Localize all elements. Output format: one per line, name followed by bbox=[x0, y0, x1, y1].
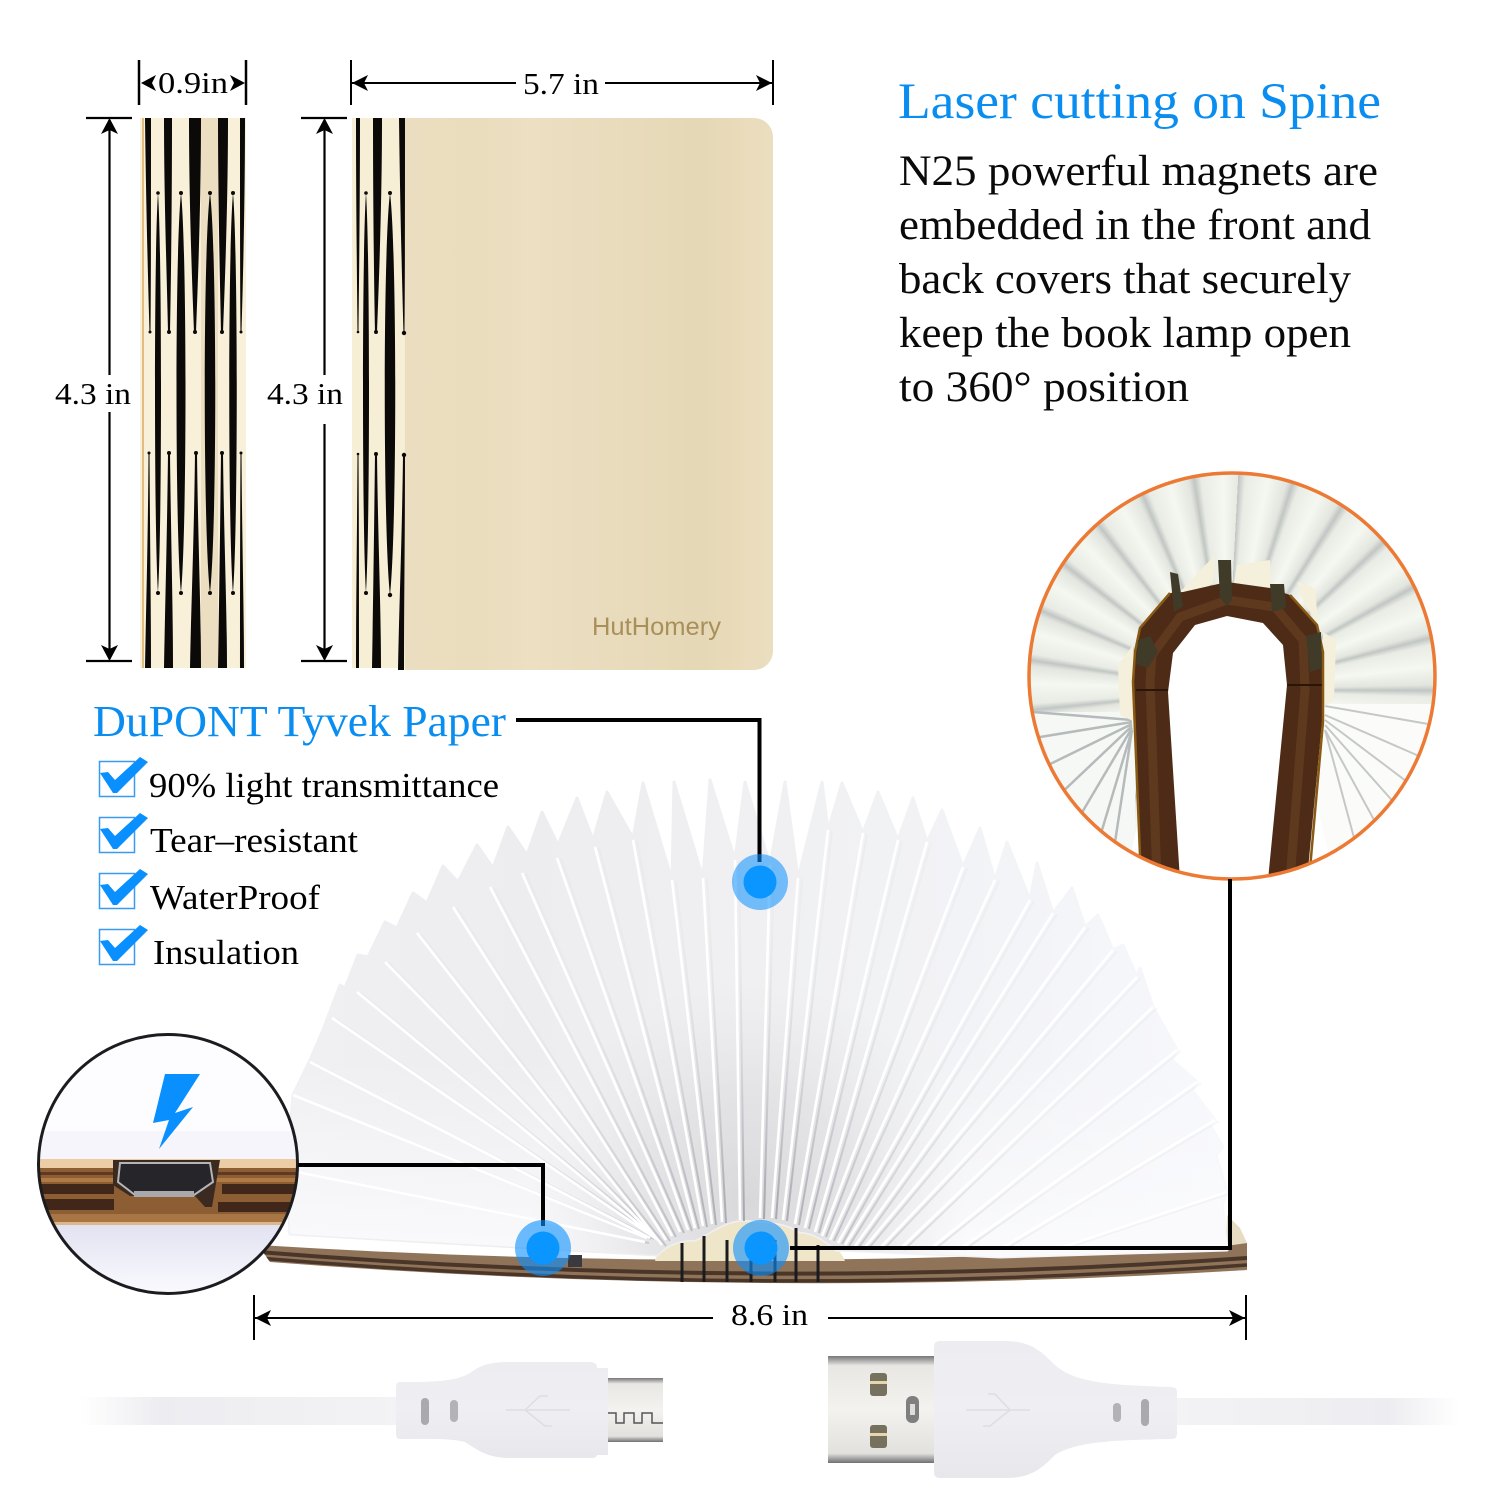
page fan silhouette bbox=[287, 780, 1227, 1257]
text block: magnets description bbox=[899, 148, 1378, 411]
text block: magnets description: back covers that securely bbox=[899, 256, 1352, 303]
inset circle: laser-cut spine close-up bbox=[1020, 473, 1440, 900]
dimension: spine width 0.9in: 0.9in bbox=[158, 65, 229, 100]
dimension: open width 8.6 in bbox=[254, 1295, 1246, 1340]
text block: magnets description: keep the book lamp open bbox=[899, 310, 1351, 357]
core shading bbox=[287, 780, 1227, 1257]
port recess bbox=[113, 1160, 220, 1207]
page folds bbox=[1030, 474, 1434, 834]
cream glue patches bbox=[1118, 555, 1336, 722]
heading: Laser cutting on Spine: Laser cutting on Spine bbox=[898, 74, 1381, 130]
USB cable: USB-A end bbox=[828, 1341, 1460, 1478]
spine threads bbox=[682, 1228, 818, 1282]
leader line: paper callout bbox=[516, 720, 760, 862]
item: WaterProof bbox=[100, 869, 320, 917]
text block: magnets description: embedded in the front and bbox=[899, 202, 1371, 249]
wood layers bbox=[40, 1168, 296, 1214]
leader line: USB port callout bbox=[298, 1165, 543, 1226]
USB port notch bbox=[568, 1255, 582, 1267]
connector body bbox=[934, 1341, 1177, 1478]
item: Tear-resistant: Tear–resistant bbox=[150, 821, 358, 860]
dimension: height 4.3 in, cover view bbox=[267, 118, 347, 661]
item: WaterProof: WaterProof bbox=[150, 878, 320, 917]
marker: paper bbox=[732, 854, 788, 910]
inset circle: micro-USB charging port bbox=[38, 1034, 300, 1297]
item: 90% light transmittance bbox=[100, 757, 499, 805]
dimension: height 4.3 in, cover view: 4.3 in bbox=[267, 376, 344, 411]
brand name on cover: HutHomery bbox=[592, 613, 722, 641]
text block: magnets description: N25 powerful magnets are bbox=[899, 148, 1378, 195]
checklist: paper features bbox=[100, 757, 499, 972]
marker: spine bbox=[733, 1220, 789, 1276]
fold shadows bbox=[291, 831, 1231, 1250]
spine view: narrow book bbox=[140, 118, 246, 668]
lower pages lighter bbox=[287, 780, 1227, 1257]
lower pages, left bbox=[1034, 712, 1135, 850]
wooden covers bbox=[264, 1243, 1247, 1284]
port metal bbox=[118, 1163, 213, 1195]
dimension: book width 5.7 in bbox=[351, 60, 773, 105]
dimension: spine width 0.9in bbox=[139, 60, 246, 105]
dimension: height 4.3 in, spine view bbox=[55, 118, 132, 661]
icon: lightning bolt bbox=[153, 1074, 200, 1149]
marker: USB port bbox=[515, 1220, 571, 1276]
brown spine arch bbox=[1133, 582, 1323, 880]
cream spine bbox=[655, 1215, 845, 1261]
item: Tear-resistant bbox=[100, 813, 358, 860]
dimension: height 4.3 in, spine view: 4.3 in bbox=[55, 376, 132, 411]
dimension: book width 5.7 in: 5.7 in bbox=[523, 66, 600, 101]
item: Insulation: Insulation bbox=[153, 933, 299, 972]
cover corner bbox=[1226, 1215, 1247, 1246]
leader line: spine callout bbox=[790, 879, 1230, 1248]
USB-A plug metal bbox=[828, 1356, 936, 1463]
item: Insulation bbox=[100, 925, 299, 972]
interior opening bbox=[1132, 616, 1287, 878]
fold highlights bbox=[287, 830, 1227, 1249]
heading: DuPONT Tyvek Paper: DuPONT Tyvek Paper bbox=[93, 697, 506, 746]
USB cable: micro-USB end bbox=[80, 1362, 663, 1458]
lower pages, right bbox=[1316, 704, 1432, 852]
micro plug metal bbox=[606, 1378, 663, 1442]
open book lamp: fanned pages on wooden covers bbox=[250, 780, 1250, 1295]
closed book: front cover with spine bbox=[352, 118, 773, 670]
text block: magnets description: to 360° position bbox=[899, 364, 1189, 411]
dimension: open width 8.6 in: 8.6 in bbox=[731, 1297, 809, 1332]
dark joints bbox=[1136, 560, 1322, 672]
item: 90% light transmittance: 90% light transmittance bbox=[149, 766, 499, 805]
connector body bbox=[396, 1362, 608, 1458]
